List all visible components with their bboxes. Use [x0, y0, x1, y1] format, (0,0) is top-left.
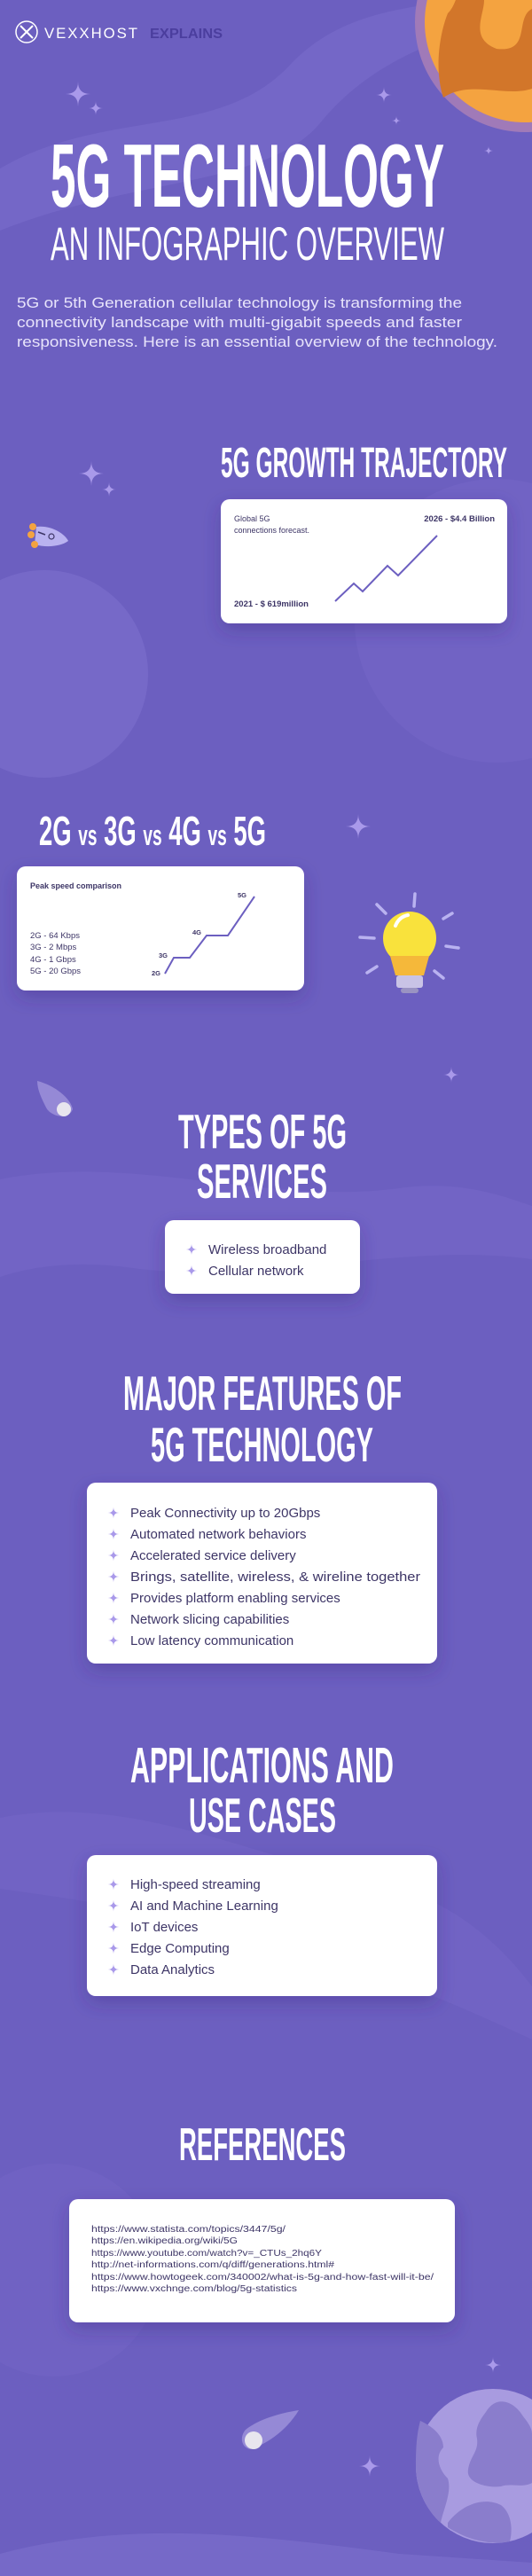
heading: types of 5G services: SERVICES — [197, 1154, 327, 1209]
panel: growth chart card: Global 5G — [234, 514, 270, 523]
panel: features list: Peak Connectivity up to 20Gbps — [130, 1506, 320, 1521]
panel: applications list: High-speed streaming — [130, 1877, 261, 1892]
panel: peak speed card: 4G - 1 Gbps — [30, 955, 76, 965]
panel: applications list: Edge Computing — [130, 1941, 230, 1956]
panel: features list: Low latency communication — [130, 1633, 293, 1648]
panel: features list: Brings, satellite, wireless, & wireline together — [130, 1570, 420, 1585]
intro paragraph: connectivity landscape with multi-gigabit speeds and faster — [17, 314, 462, 331]
heading: applications and use cases: USE CASES — [189, 1788, 336, 1843]
panel: features list — [87, 1483, 437, 1664]
panel: references list: https://www.statista.com/topics/3447/5g/ — [91, 2225, 286, 2235]
heading: types of 5G services — [178, 1104, 347, 1209]
line chart — [335, 536, 437, 601]
panel: references list: https://www.youtube.com/watch?v=_CTUs_2hq6Y — [91, 2249, 322, 2259]
icon: light bulb — [360, 894, 458, 993]
panel: peak speed card: Peak speed comparison — [30, 881, 121, 890]
panel: features list: Network slicing capabilities — [130, 1612, 289, 1627]
panel: features list: Accelerated service delivery — [130, 1548, 296, 1563]
panel: services list — [165, 1220, 360, 1294]
panel: applications list — [87, 1855, 437, 1996]
panel: peak speed card: 5G - 20 Gbps — [30, 967, 81, 976]
panel: references list: https://www.howtogeek.com/340002/what-is-5g-and-how-fast-will-it-be/ — [91, 2273, 434, 2282]
panel: peak speed card: 2G - 64 Kbps — [30, 931, 80, 941]
panel: applications list: IoT devices — [130, 1920, 198, 1935]
heading: references: REFERENCES — [179, 2119, 346, 2171]
panel: services list: Cellular network — [208, 1264, 304, 1279]
step chart: 4G — [192, 928, 201, 936]
panel: peak speed card: 3G - 2 Mbps — [30, 943, 77, 952]
logo: EXPLAINS — [150, 27, 223, 42]
panel: peak speed card — [17, 866, 304, 990]
icon: purple planet — [416, 2389, 532, 2543]
logo: VEXXHOST — [44, 25, 139, 42]
heading: major features — [123, 1366, 402, 1472]
step chart: 5G — [238, 891, 246, 899]
step chart — [152, 891, 254, 977]
panel: references list — [69, 2199, 455, 2322]
panel: services list: Wireless broadband — [208, 1242, 326, 1257]
heading: 2G vs 3G vs 4G vs 5G: 2G vs 3G vs 4G vs 5G — [39, 808, 266, 854]
icon: orange planet — [415, 0, 532, 132]
step chart: 2G — [152, 969, 160, 977]
heading: applications and use cases — [130, 1737, 394, 1843]
panel: references list: https://en.wikipedia.org/wiki/5G — [91, 2236, 238, 2246]
panel: features list: Automated network behaviors — [130, 1527, 306, 1542]
intro paragraph: responsiveness. Here is an essential overview of the technology. — [17, 333, 497, 350]
panel: growth chart card: 2026 - $4.4 Billion — [424, 514, 495, 524]
step chart: 3G — [159, 951, 168, 959]
logo — [16, 21, 223, 43]
panel: applications list: Data Analytics — [130, 1962, 215, 1977]
panel: growth chart card: 2021 - $ 619million — [234, 599, 309, 609]
intro paragraph: 5G or 5th Generation cellular technology is transforming the — [17, 294, 462, 311]
panel: references list: http://net-informations.com/q/diff/generations.html# — [91, 2260, 335, 2270]
panel: growth chart card: connections forecast. — [234, 526, 309, 535]
panel: references list: https://www.vxchnge.com/blog/5g-statistics — [91, 2284, 297, 2294]
panel: growth chart card — [221, 499, 507, 623]
panel: applications list: AI and Machine Learning — [130, 1899, 278, 1914]
decorative stars top — [66, 82, 501, 2477]
heading: types of 5G services: TYPES OF 5G — [178, 1104, 347, 1159]
icon: rocket — [27, 523, 68, 548]
icon: comet bottom — [242, 2410, 299, 2449]
intro paragraph — [17, 294, 497, 350]
icon: comet left — [37, 1081, 73, 1116]
panel: features list: Provides platform enabling services — [130, 1591, 340, 1606]
